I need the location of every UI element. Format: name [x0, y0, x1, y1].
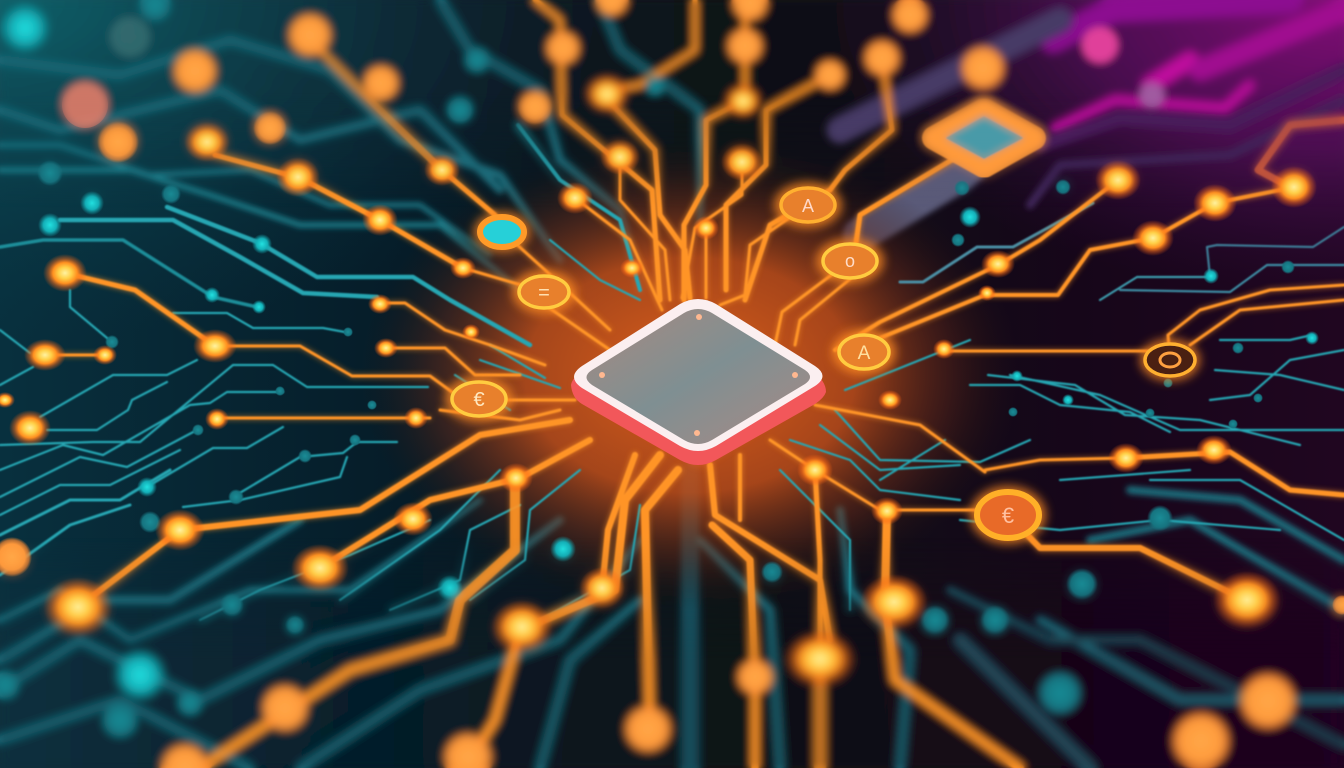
ring: pill icon: [519, 276, 569, 308]
ring: large lower right: €: [1002, 503, 1014, 528]
ring: letter A: A: [858, 343, 871, 364]
magenta out-of-focus traces: [1053, 0, 1344, 128]
chip face: [586, 309, 810, 444]
chip side: [571, 307, 826, 465]
ring: letter A: [839, 335, 889, 369]
ring glows: [445, 182, 1200, 544]
ring: arrow icon top: A: [802, 196, 814, 216]
ring: coin icon: o: [845, 251, 855, 271]
ring: pill icon: =: [538, 282, 550, 304]
sharp teal traces: [0, 125, 1344, 620]
ring: large lower right: [977, 492, 1039, 538]
ring: teal: [480, 217, 524, 247]
ring: circle right: [1145, 344, 1195, 376]
chip top rim: [574, 299, 822, 451]
large diamond component: [934, 110, 1034, 166]
central orange glow: [360, 140, 1020, 610]
central chip: [571, 299, 826, 465]
ring nodes: [445, 182, 1200, 544]
glowing nodes: [0, 74, 1317, 688]
chip corner dots: [599, 314, 798, 436]
chip glow: [575, 310, 820, 465]
ring: euro: €: [473, 389, 485, 411]
ring: coin icon: [823, 244, 877, 278]
ring: arrow icon top: [781, 188, 835, 222]
ring: euro: [452, 382, 506, 416]
